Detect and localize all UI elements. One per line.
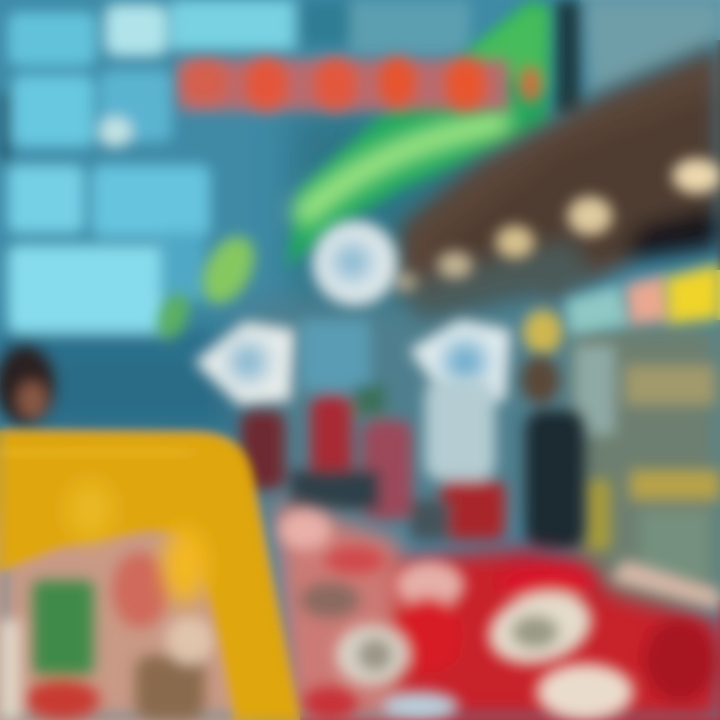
top right: wall and pillar bbox=[555, 0, 720, 115]
banner: green swoosh bbox=[151, 0, 548, 343]
signs: three round white signs bbox=[195, 221, 510, 405]
floor: red and white display bbox=[275, 500, 720, 720]
banner: red with round signs bbox=[178, 57, 541, 110]
glass roof: left windows bbox=[0, 0, 470, 359]
ceiling: brown canopy bbox=[395, 45, 720, 320]
people: crowd bbox=[0, 320, 585, 550]
under arch: bottom left items bbox=[0, 515, 250, 720]
ceiling lights bbox=[393, 159, 720, 354]
yellow arch bbox=[0, 430, 300, 720]
shop: right side display bbox=[565, 264, 720, 610]
